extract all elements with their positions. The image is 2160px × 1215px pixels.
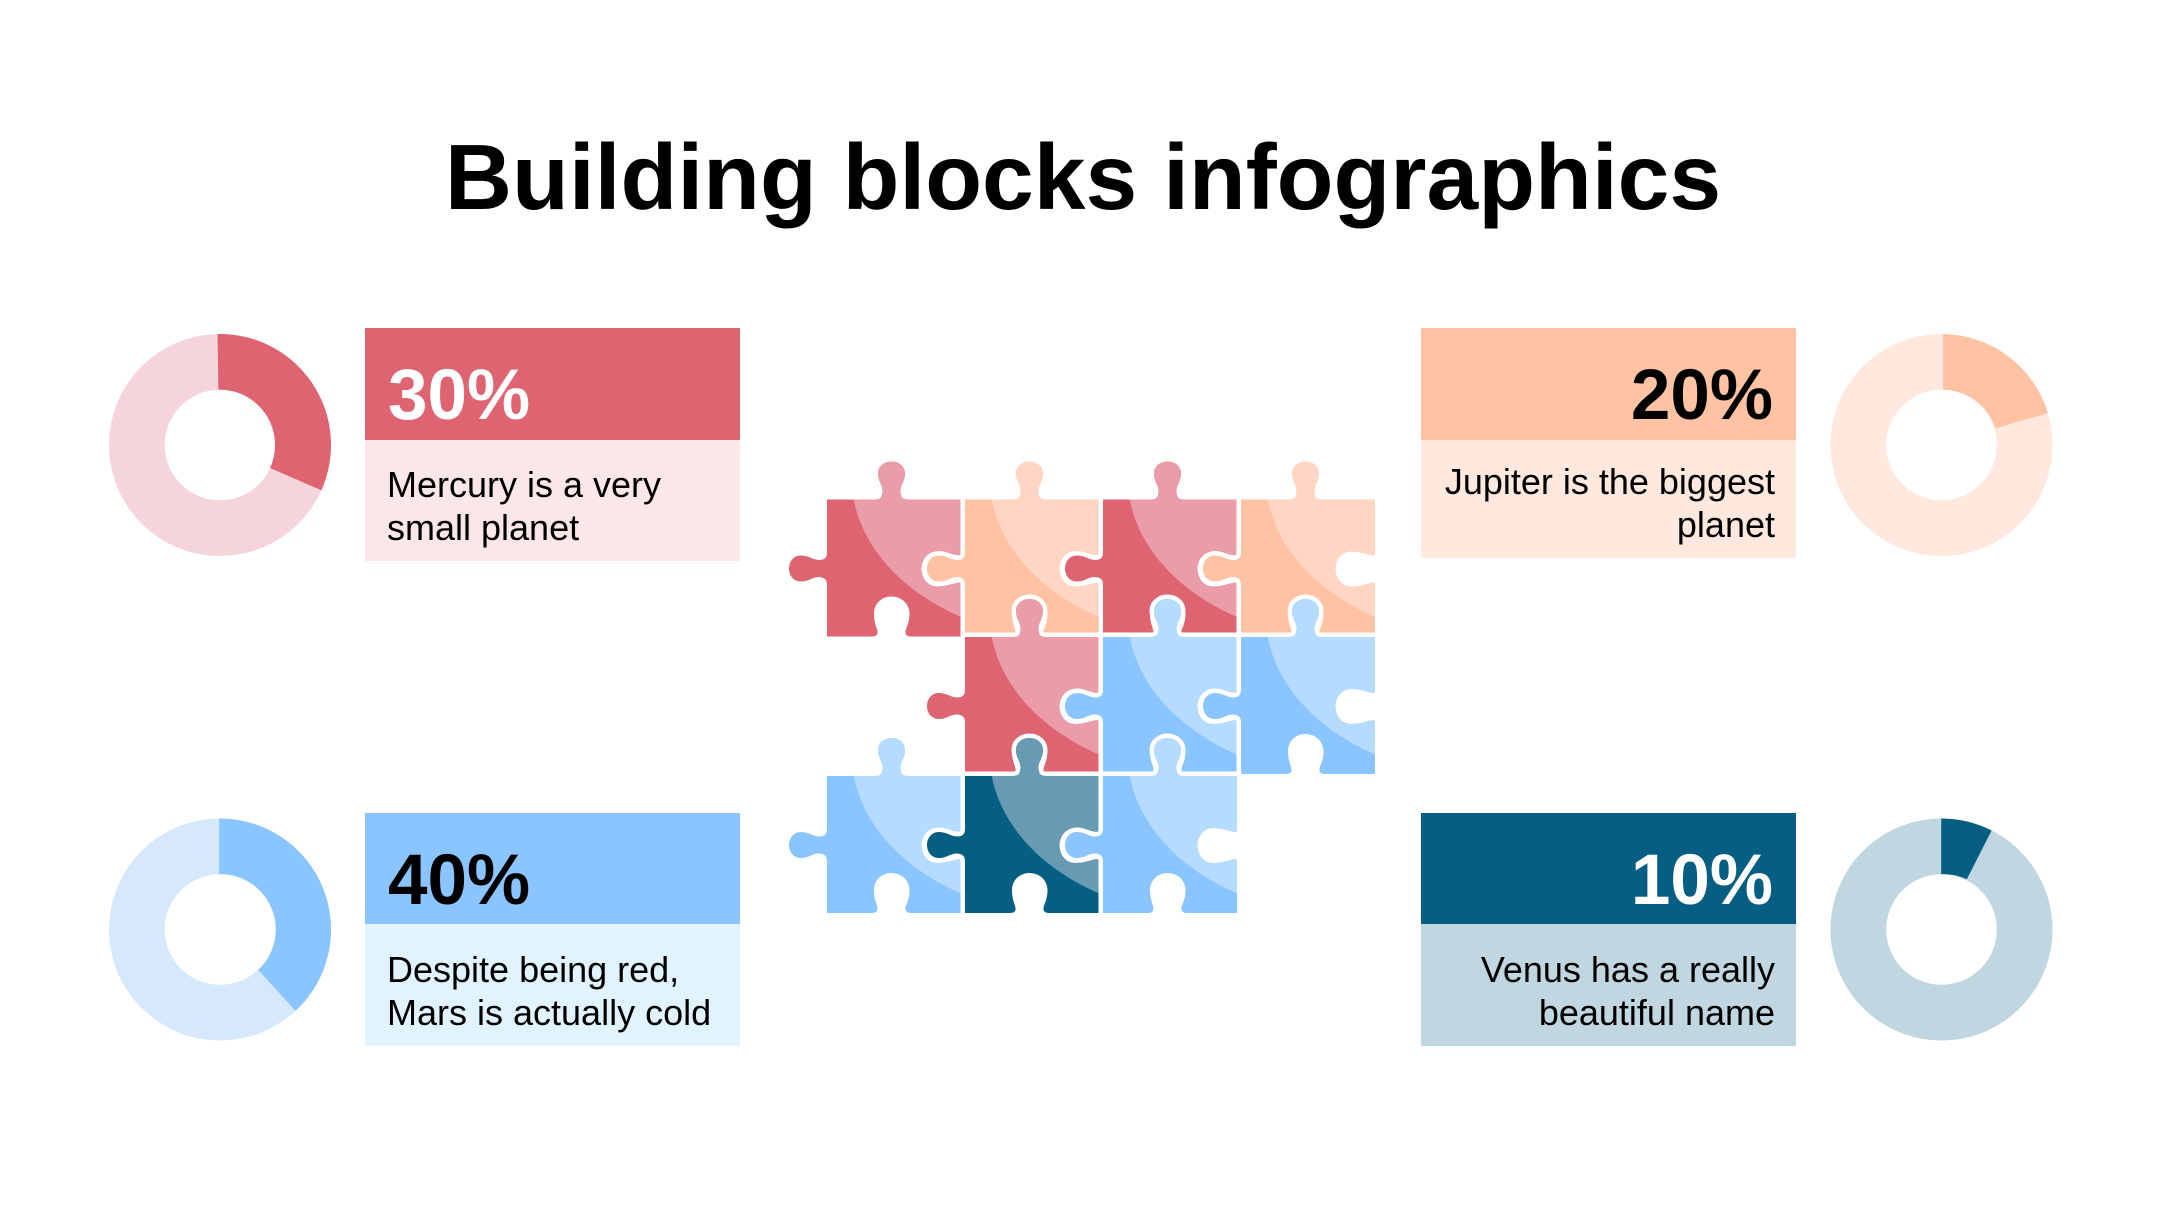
percentage 10%: 10% (1631, 841, 1773, 920)
panel: header Jupiter (1421, 328, 1796, 440)
graphics layer: donuts and puzzle (109, 334, 2052, 1040)
donut chart: Venus 10% (1858, 818, 2025, 1013)
puzzle piece: row 1 column 2 peach (927, 450, 1099, 636)
text: Jupiter: planet (1677, 504, 1775, 544)
puzzle piece: row 2 column 4 blue (1203, 587, 1375, 774)
puzzle piece: row 1 column 1 red (789, 450, 961, 636)
percentage 40%: 40% (388, 841, 530, 920)
text: Mercury (387, 464, 661, 548)
puzzle piece: row 1 column 3 red (1065, 450, 1237, 636)
puzzle piece: row 1 column 4 peach (1203, 450, 1375, 636)
donut chart: Mars 40% (137, 818, 331, 1013)
puzzle piece: row 3 column 3 blue (1065, 726, 1237, 913)
panel: header Mercury (365, 328, 740, 440)
puzzle piece: row 3 column 1 blue (789, 726, 961, 913)
text: Mars (387, 948, 711, 1032)
puzzle: building blocks (789, 450, 1375, 913)
text: Venus: Venus has a really (1481, 948, 1775, 990)
panel: header Mars (365, 813, 740, 924)
puzzle piece: row 2 column 3 blue (1065, 587, 1237, 774)
donut chart: Mercury 30% (137, 334, 331, 528)
text: Mercury: Mercury is a very (387, 464, 661, 505)
panel: header Venus (1421, 813, 1796, 924)
percentage 30%: 30% (388, 356, 530, 435)
text: Jupiter: Jupiter is the biggest (1445, 460, 1775, 502)
puzzle piece: row 3 column 2 dark teal (927, 726, 1099, 913)
text: Mars: Despite being red, (387, 948, 679, 990)
panel: body Jupiter (1421, 440, 1796, 558)
panel: body Mars (365, 924, 740, 1046)
text: Venus: beautiful name (1539, 992, 1775, 1032)
panel: body Mercury (365, 440, 740, 561)
text: Mars: Mars is actually cold (387, 992, 711, 1032)
title: Building blocks infographics (445, 125, 1721, 229)
text: Jupiter (1445, 460, 1775, 544)
text: Mercury: small planet (387, 507, 579, 548)
text: Venus (1481, 948, 1775, 1032)
percentage 20%: 20% (1631, 356, 1773, 435)
puzzle piece: row 2 column 2 red (927, 587, 1099, 774)
donut chart: Jupiter 20% (1858, 334, 2048, 528)
panel: body Venus (1421, 924, 1796, 1046)
